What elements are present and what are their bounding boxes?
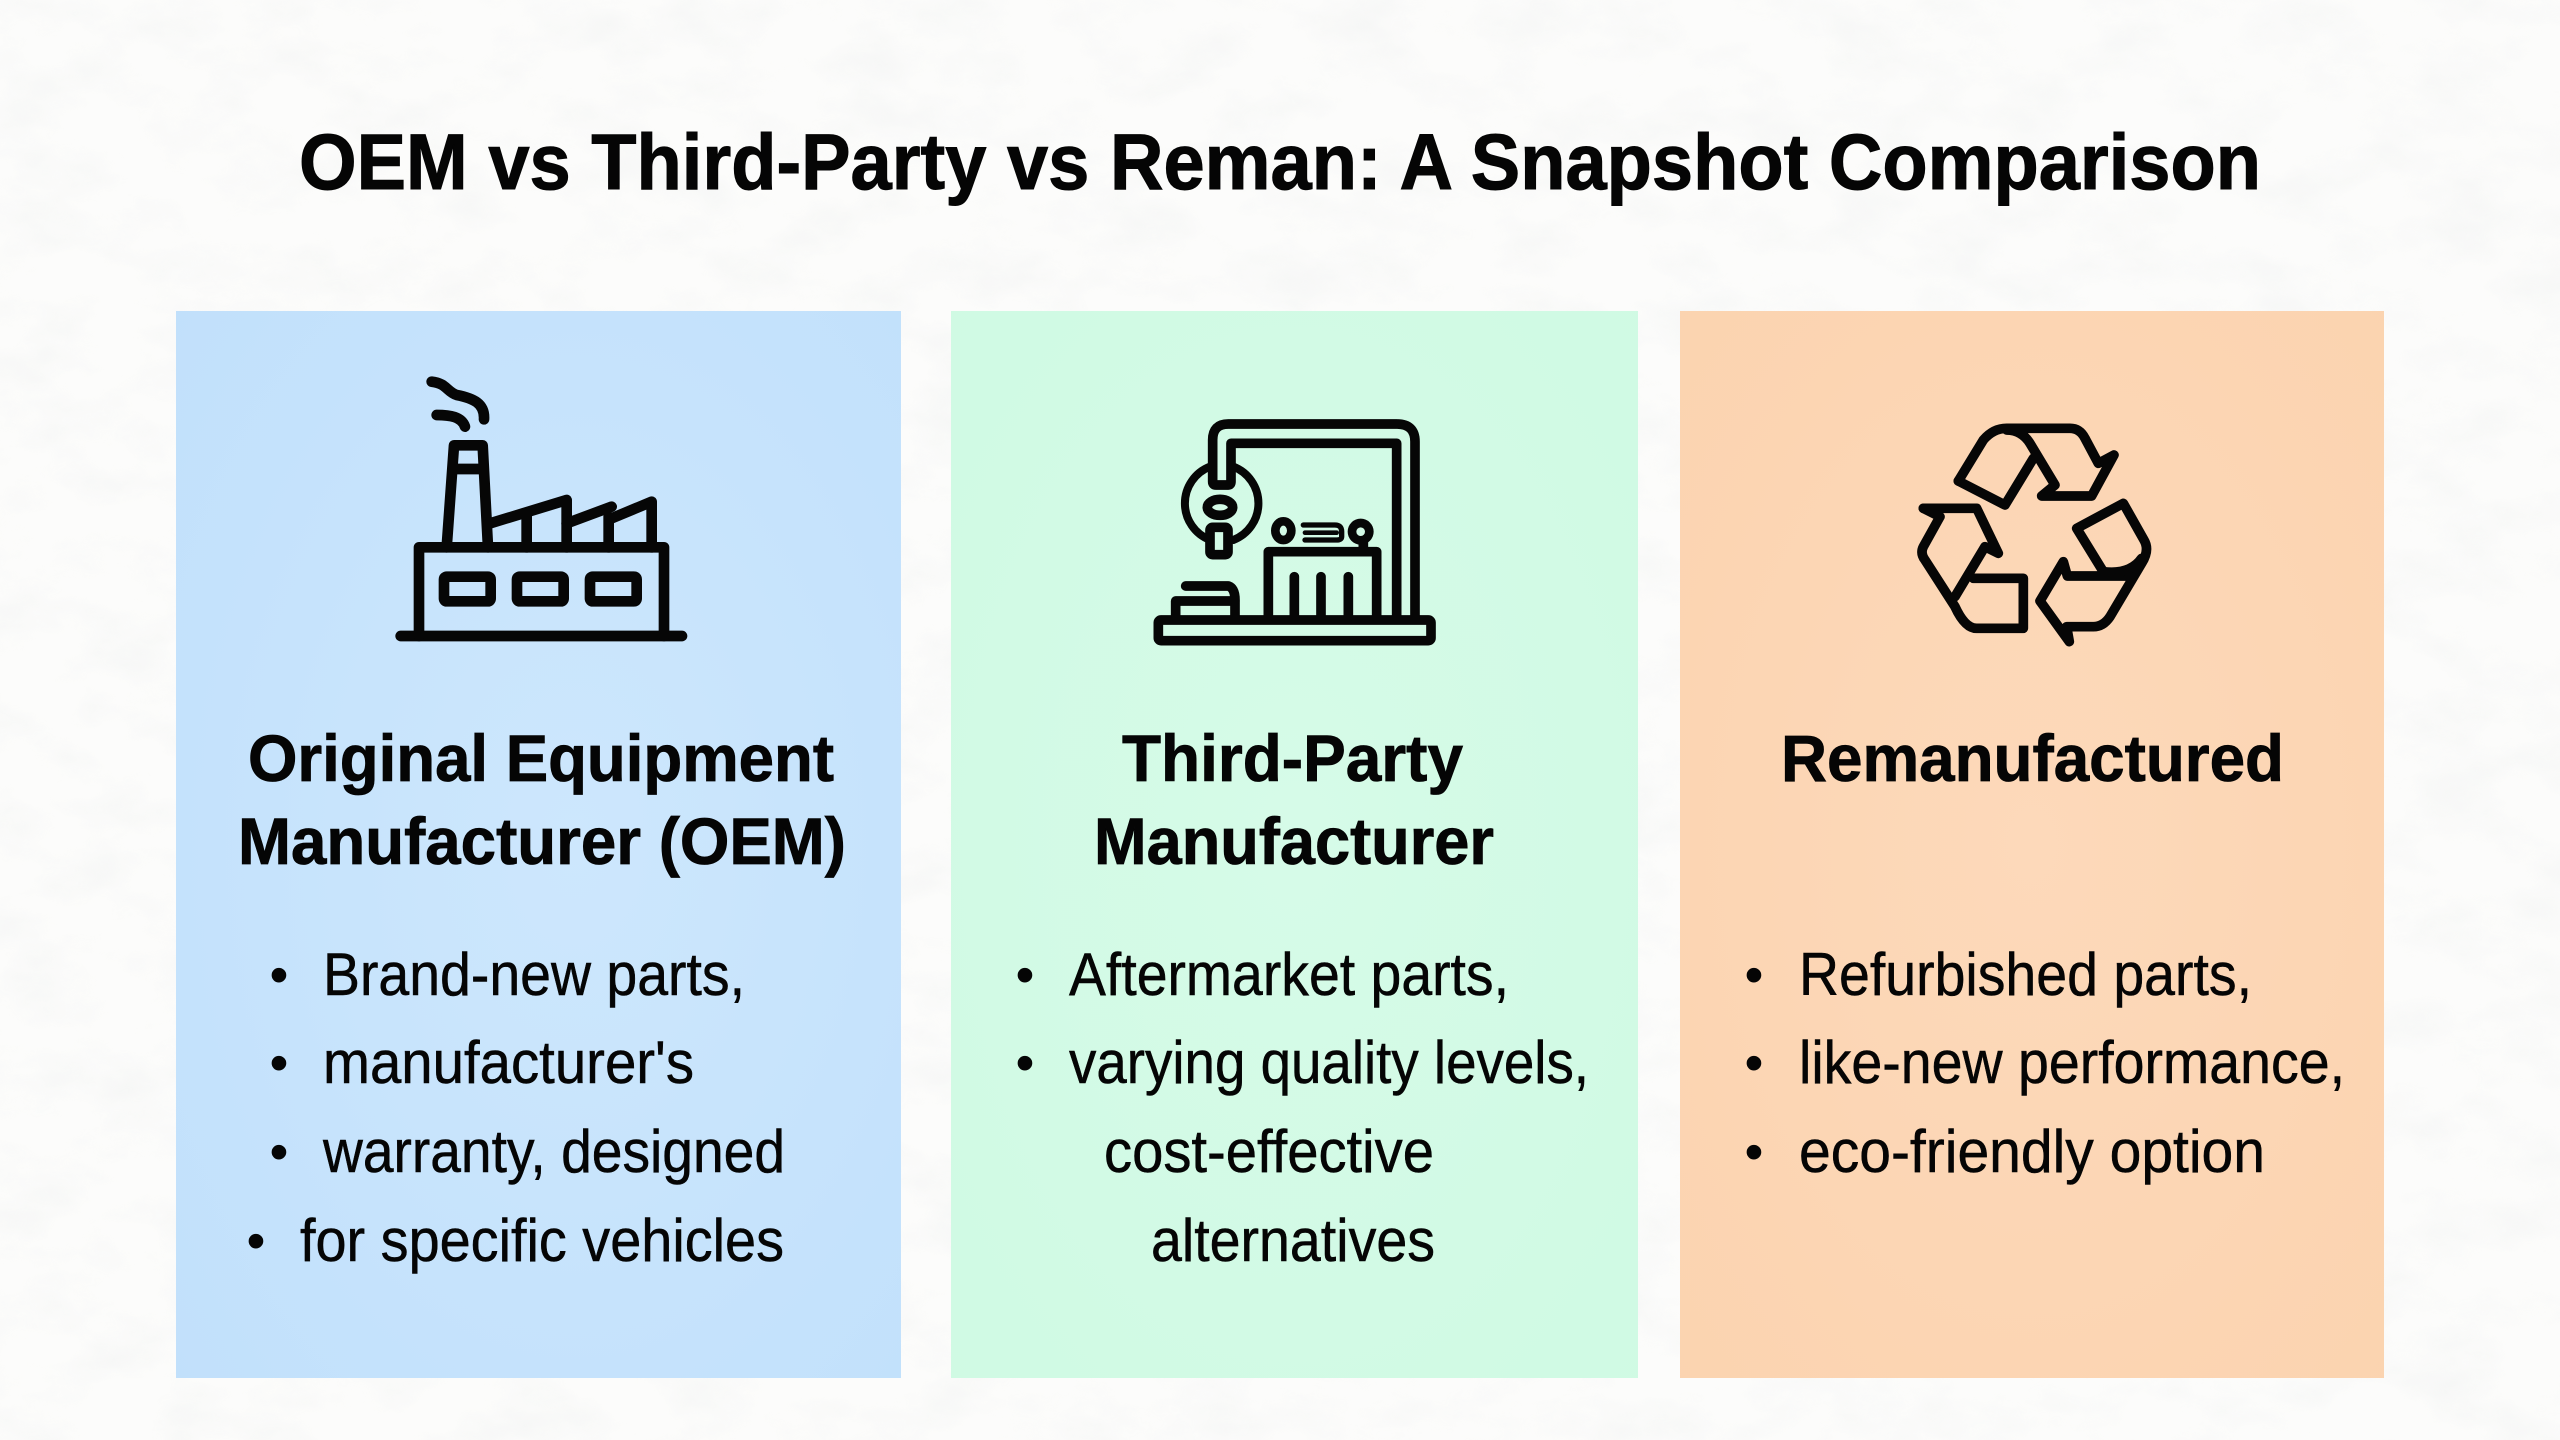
bullet list: OEM: • <box>270 945 288 1005</box>
heading: Remanufactured: Remanufactured <box>1781 721 2284 795</box>
bullet list: OEM: for specific vehicles <box>300 1207 784 1274</box>
panel: Remanufactured <box>1680 311 2384 1378</box>
heading: OEM: Manufacturer (OEM) <box>238 804 846 878</box>
bullet list: OEM: • <box>270 1122 288 1182</box>
bullet list: Remanufactured: • <box>1745 1122 1763 1182</box>
bullet list: Third-Party: • <box>1016 1033 1034 1093</box>
heading: OEM <box>238 721 846 878</box>
bullet list: Remanufactured <box>1745 941 2345 1185</box>
bullet list: Third-Party: alternatives <box>1151 1207 1435 1274</box>
bullet list: Third-Party: cost-effective <box>1104 1118 1434 1185</box>
bullet list: Remanufactured: eco-friendly option <box>1799 1118 2265 1185</box>
heading: OEM: Original Equipment <box>248 721 834 795</box>
bullet list: Third-Party <box>1016 941 1589 1274</box>
icon: factory <box>401 382 682 636</box>
bullet list: Third-Party: • <box>1016 945 1034 1005</box>
bullet list: OEM: Brand-new parts, <box>323 941 745 1008</box>
bullet list: Remanufactured: like-new performance, <box>1799 1029 2345 1096</box>
bullet list: Remanufactured: • <box>1745 945 1763 1005</box>
bullet list: OEM <box>247 941 785 1274</box>
bullet list: Third-Party: varying quality levels, <box>1069 1029 1589 1096</box>
bullet list: OEM: warranty, designed <box>322 1118 785 1185</box>
bullet list: OEM: • <box>247 1211 265 1271</box>
heading: Third-Party <box>1094 721 1494 878</box>
heading: Third-Party: Third-Party <box>1122 721 1463 795</box>
bullet list: Third-Party: Aftermarket parts, <box>1069 941 1509 1008</box>
title: OEM vs Third-Party vs Reman: A Snapshot Comparison <box>299 117 2261 206</box>
panel: OEM <box>176 311 901 1378</box>
bullet list: OEM: • <box>270 1033 288 1093</box>
icon: machine <box>1158 424 1431 641</box>
bullet list: Remanufactured: • <box>1745 1033 1763 1093</box>
icon: recycle <box>1922 428 2147 642</box>
heading: Third-Party: Manufacturer <box>1094 804 1494 878</box>
bullet list: OEM: manufacturer's <box>323 1029 694 1096</box>
bullet list: Remanufactured: Refurbished parts, <box>1799 941 2252 1008</box>
panel: Third-Party <box>951 311 1638 1378</box>
